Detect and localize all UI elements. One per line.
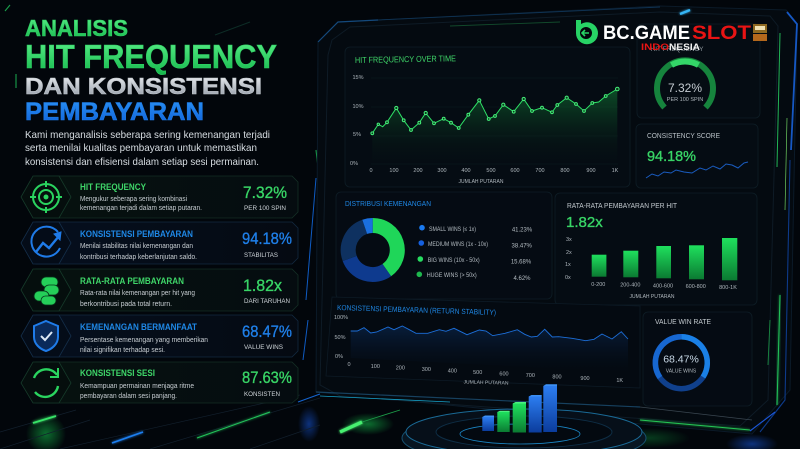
panel: hit frequency over time bbox=[345, 47, 630, 187]
panel: value win rate: VALUE WIN RATE bbox=[655, 317, 711, 326]
panel: konsistensi sesi: KONSISTENSI SESI bbox=[80, 368, 155, 378]
panel: rata-rata pembayaran per hit: 0x bbox=[565, 275, 571, 281]
panel: hit frequency: HIT FREQUENCY bbox=[80, 182, 146, 192]
panel: hit frequency over time: 600 bbox=[510, 168, 520, 174]
panel: konsistensi pembayaran return stability: 400 bbox=[448, 368, 457, 374]
bar 2 bbox=[497, 411, 510, 432]
panel: hit frequency over time: 5% bbox=[353, 132, 361, 138]
panel: hit frequency over time: 0 bbox=[369, 168, 373, 174]
logo: BC.GAME SLOT INDONESIA bbox=[576, 20, 767, 53]
panel: rata-rata pembayaran bbox=[21, 269, 298, 311]
bar chart bbox=[592, 238, 737, 280]
panel: rata-rata pembayaran per hit: 1.82x bbox=[566, 214, 603, 231]
bar 4 bbox=[529, 395, 542, 432]
intro text: konsistensi dan efisiensi dalam setiap sesi permainan. bbox=[25, 156, 259, 168]
panel: hit frequency bbox=[21, 176, 298, 218]
panel: consistency score bbox=[636, 124, 758, 188]
legend: BIG WINS (10x - 50x) bbox=[428, 258, 480, 264]
legend: MEDIUM WINS (1x - 10x) bbox=[428, 242, 488, 248]
monitor frame bbox=[316, 6, 797, 434]
panel: hit frequency gauge: 7.32% bbox=[668, 81, 702, 95]
panel: kemenangan bermanfaat bbox=[21, 315, 298, 357]
panel: konsistensi pembayaran return stability: KONSISTENSI PEMBAYARAN (RETURN STABILITY) bbox=[337, 303, 497, 317]
panel: hit frequency over time: 300 bbox=[437, 168, 447, 174]
panel: konsistensi sesi: Kemampuan permainan menjaga ritme bbox=[80, 383, 194, 390]
panel: konsistensi pembayaran return stability: 300 bbox=[422, 367, 431, 373]
panel: konsistensi pembayaran: 94.18% bbox=[242, 229, 292, 248]
panel: konsistensi pembayaran return stability: 1K bbox=[616, 378, 623, 384]
panel: hit frequency gauge: PER 100 SPIN bbox=[667, 97, 703, 103]
panel: distribusi kemenangan bbox=[336, 192, 552, 299]
panel: konsistensi pembayaran return stability: 200 bbox=[396, 366, 405, 372]
logo: BC.GAME SLOT INDONESIA: BC.GAME bbox=[603, 23, 690, 44]
panel: konsistensi pembayaran: STABILITAS bbox=[244, 252, 279, 259]
title: PEMBAYARAN bbox=[25, 98, 204, 126]
panel: hit frequency: 7.32% bbox=[243, 183, 287, 202]
panel: hit frequency: Mengukur seberapa sering kombinasi bbox=[80, 196, 187, 203]
panel: konsistensi pembayaran return stability: 0% bbox=[335, 354, 343, 360]
panel: hit frequency over time: 800 bbox=[560, 168, 570, 174]
panel: rata-rata pembayaran: Rata-rata nilai kemenangan per hit yang bbox=[80, 290, 195, 297]
panel: rata-rata pembayaran per hit: RATA-RATA PEMBAYARAN PER HIT bbox=[567, 201, 677, 210]
icon: slot machine bbox=[753, 24, 767, 41]
panel: kemenangan bermanfaat: Persentase kemenangan yang memberikan bbox=[80, 337, 208, 344]
chart: sparkline bbox=[646, 162, 748, 178]
panel: rata-rata pembayaran per hit: JUMLAH PUTARAN bbox=[630, 294, 675, 300]
panel: konsistensi pembayaran: Menilai stabilitas nilai kemenangan dan bbox=[80, 243, 193, 250]
bar 5 bbox=[543, 384, 557, 432]
legend: 38.47% bbox=[512, 244, 533, 250]
panel: konsistensi pembayaran: kontribusi terhadap keberlanjutan saldo. bbox=[80, 254, 197, 261]
panel: konsistensi pembayaran return stability: 0 bbox=[347, 362, 351, 368]
chart: donut bbox=[348, 225, 397, 275]
title: DAN KONSISTENSI bbox=[25, 73, 262, 99]
logo: BC.GAME SLOT INDONESIA: INDO bbox=[641, 42, 669, 53]
panel: konsistensi pembayaran return stability: 100 bbox=[371, 364, 380, 370]
panel: rata-rata pembayaran per hit: 0-200 bbox=[591, 282, 605, 288]
panel: hit frequency gauge bbox=[637, 24, 760, 118]
panel: konsistensi pembayaran return stability: JUMLAH PUTARAN bbox=[463, 379, 509, 387]
panel: konsistensi pembayaran return stability: 800 bbox=[552, 374, 562, 380]
intro text bbox=[25, 129, 270, 168]
panel: rata-rata pembayaran: RATA-RATA PEMBAYARAN bbox=[80, 276, 184, 286]
panel: kemenangan bermanfaat: VALUE WINS bbox=[244, 344, 284, 351]
panel: konsistensi pembayaran return stability bbox=[326, 297, 640, 388]
panel: hit frequency over time: 1K bbox=[612, 168, 619, 174]
panel: kemenangan bermanfaat: nilai signifikan terhadap sesi. bbox=[80, 347, 165, 354]
bar 3 bbox=[513, 402, 526, 432]
panel: hit frequency over time: 900 bbox=[586, 168, 596, 174]
legend: SMALL WINS (≤ 1x) bbox=[429, 227, 476, 233]
panel: konsistensi pembayaran: KONSISTENSI PEMBAYARAN bbox=[80, 229, 193, 239]
panel: hit frequency over time: 100 bbox=[389, 168, 399, 174]
panel: rata-rata pembayaran per hit: 1x bbox=[565, 262, 571, 268]
legend bbox=[416, 225, 533, 282]
intro text: serta menilai kualitas pembayaran untuk memastikan bbox=[25, 142, 257, 154]
panel: value win rate: 68.47% bbox=[663, 354, 699, 366]
panel: konsistensi pembayaran return stability: 700 bbox=[526, 373, 535, 379]
panel: hit frequency over time: 10% bbox=[352, 104, 364, 110]
panel: hit frequency over time: 200 bbox=[413, 168, 423, 174]
chart: stability line bbox=[351, 326, 628, 372]
panel: konsistensi sesi: pembayaran dalam sesi panjang. bbox=[80, 393, 177, 400]
panel: consistency score: 94.18% bbox=[647, 148, 696, 165]
gauge arc bbox=[657, 60, 713, 108]
panel: hit frequency over time: 500 bbox=[486, 168, 496, 174]
panel: rata-rata pembayaran: berkontribusi pada total return. bbox=[80, 301, 172, 308]
panel: konsistensi pembayaran return stability: 600 bbox=[499, 372, 509, 378]
icon: logo mark bbox=[576, 20, 598, 44]
panel: rata-rata pembayaran: DARI TARUHAN bbox=[244, 298, 290, 305]
platform with 3D bars bbox=[402, 384, 646, 449]
panel: rata-rata pembayaran per hit: 600-800 bbox=[686, 284, 706, 290]
panel: konsistensi pembayaran bbox=[21, 222, 298, 264]
icon: cycle arrows bbox=[21, 362, 71, 403]
panel: rata-rata pembayaran per hit: 400-600 bbox=[653, 284, 673, 290]
panel: rata-rata pembayaran per hit: 200-400 bbox=[620, 282, 640, 288]
panel: hit frequency over time: 400 bbox=[461, 168, 471, 174]
panel: rata-rata pembayaran: 1.82x bbox=[243, 276, 282, 295]
panel: consistency score: CONSISTENCY SCORE bbox=[647, 131, 720, 140]
panel: rata-rata pembayaran per hit bbox=[555, 193, 757, 305]
panel: konsistensi sesi: KONSISTEN bbox=[244, 391, 280, 398]
title: HIT FREQUENCY bbox=[25, 38, 277, 75]
icon: shield bbox=[21, 315, 71, 357]
panel: hit frequency over time: 700 bbox=[535, 168, 545, 174]
intro text: Kami menganalisis seberapa sering kemenangan terjadi bbox=[25, 129, 270, 141]
ring gauge bbox=[655, 337, 707, 389]
title bbox=[25, 15, 277, 126]
panel: hit frequency: PER 100 SPIN bbox=[244, 205, 286, 212]
panel: konsistensi pembayaran return stability: 100% bbox=[334, 315, 348, 321]
panel: hit frequency: kemenangan terjadi dalam setiap putaran. bbox=[80, 205, 202, 212]
panel: rata-rata pembayaran per hit: 2x bbox=[566, 250, 572, 256]
panel: hit frequency over time: JUMLAH PUTARAN bbox=[459, 179, 504, 185]
panel: konsistensi sesi bbox=[21, 362, 298, 403]
panel: rata-rata pembayaran per hit: 800-1K bbox=[719, 285, 737, 291]
panel: distribusi kemenangan: DISTRIBUSI KEMENANGAN bbox=[345, 199, 431, 208]
panel: konsistensi sesi: 87.63% bbox=[242, 368, 292, 387]
icon: target bbox=[21, 176, 71, 218]
panel: hit frequency over time: 0% bbox=[350, 161, 358, 167]
panel: value win rate bbox=[643, 312, 752, 406]
panel: konsistensi pembayaran return stability: 50% bbox=[334, 335, 346, 341]
title: ANALISIS bbox=[25, 15, 128, 41]
logo: BC.GAME SLOT INDONESIA: SLOT bbox=[692, 23, 751, 44]
panel: value win rate: VALUE WINS bbox=[666, 368, 697, 374]
panel: hit frequency over time: HIT FREQUENCY OVER TIME bbox=[355, 53, 456, 65]
panel: kemenangan bermanfaat: 68.47% bbox=[242, 322, 292, 341]
legend: HUGE WINS (> 50x) bbox=[427, 273, 477, 279]
panel: hit frequency over time: 15% bbox=[352, 75, 364, 81]
legend: 15.68% bbox=[511, 260, 532, 266]
icon: coins bbox=[21, 269, 71, 311]
panel: kemenangan bermanfaat: KEMENANGAN BERMANFAAT bbox=[80, 322, 197, 332]
logo: BC.GAME SLOT INDONESIA: NESIA bbox=[669, 42, 700, 53]
legend: 41.23% bbox=[512, 228, 533, 234]
bar 1 bbox=[482, 416, 494, 431]
chart: hit frequency line bbox=[371, 87, 619, 164]
panel: rata-rata pembayaran per hit: 3x bbox=[566, 237, 572, 243]
panel: konsistensi pembayaran return stability: 900 bbox=[580, 376, 590, 382]
icon: trend circle bbox=[21, 222, 71, 264]
panel: konsistensi pembayaran return stability: 500 bbox=[473, 370, 482, 376]
panel: hit frequency gauge: HIT FREQUENCY bbox=[651, 46, 704, 53]
legend: 4.62% bbox=[513, 276, 531, 282]
